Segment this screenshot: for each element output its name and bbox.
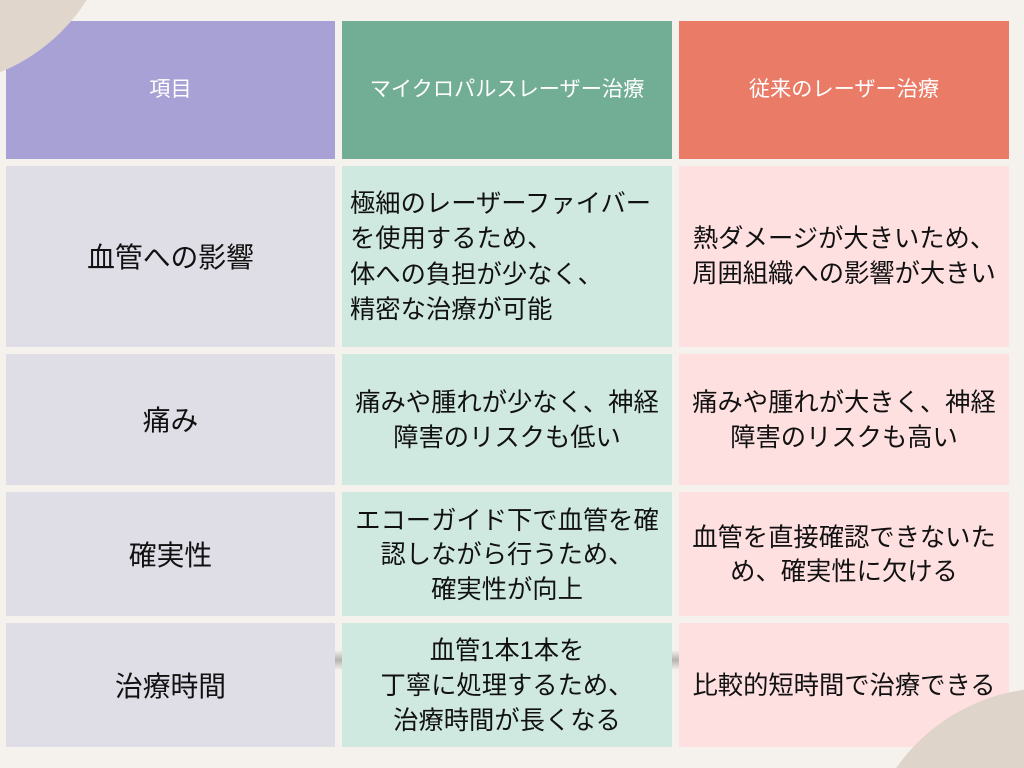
micropulse cell: vascular impact: 極細のレーザーファイバー bbox=[350, 190, 651, 218]
conventional cell: vascular impact bbox=[679, 166, 1009, 347]
row label: pain: 痛み bbox=[143, 405, 198, 436]
table header: conventional laser: 従来のレーザー治療 bbox=[749, 78, 939, 101]
row label: treatment time: 治療時間 bbox=[115, 671, 226, 702]
micropulse cell: treatment time: 血管1本1本を bbox=[430, 637, 584, 665]
row label: vascular impact: 血管への影響 bbox=[87, 242, 254, 273]
conventional cell: certainty: 血管を直接確認できないた bbox=[692, 524, 996, 552]
row label: treatment time bbox=[6, 623, 335, 747]
conventional cell: certainty: め、確実性に欠ける bbox=[730, 558, 958, 586]
micropulse cell: pain bbox=[342, 354, 672, 485]
micropulse cell: treatment time bbox=[342, 623, 672, 747]
table header: micropulse laser: マイクロパルスレーザー治療 bbox=[370, 78, 644, 101]
micropulse cell: vascular impact: 体への負担が少なく、 bbox=[350, 261, 603, 289]
micropulse cell: certainty: エコーガイド下で血管を確 bbox=[355, 507, 659, 535]
conventional cell: treatment time bbox=[679, 623, 1009, 747]
micropulse cell: vascular impact: を使用するため、 bbox=[350, 225, 552, 253]
micropulse cell: treatment time: 治療時間が長くなる bbox=[393, 707, 621, 735]
micropulse cell: treatment time: 丁寧に処理するため、 bbox=[380, 672, 633, 700]
micropulse cell: certainty: 認しながら行うため、 bbox=[380, 541, 633, 569]
shadow smudge: left gutter bbox=[335, 650, 342, 670]
micropulse cell: pain: 障害のリスクも低い bbox=[393, 424, 621, 452]
micropulse cell: vascular impact: 精密な治療が可能 bbox=[350, 296, 552, 324]
decoration: top-left circle bbox=[0, 0, 87, 72]
table header: item: 項目 bbox=[149, 78, 192, 101]
row label: certainty bbox=[6, 492, 335, 616]
row label: certainty: 確実性 bbox=[129, 540, 212, 571]
conventional cell: vascular impact: 熱ダメージが大きいため、 bbox=[693, 225, 995, 253]
decoration: bottom-right circle bbox=[896, 690, 1024, 768]
micropulse cell: certainty bbox=[342, 492, 672, 616]
conventional cell: treatment time: 比較的短時間で治療できる bbox=[692, 672, 996, 700]
conventional cell: certainty bbox=[679, 492, 1009, 616]
micropulse cell: pain: 痛みや腫れが少なく、神経 bbox=[355, 389, 659, 417]
conventional cell: pain: 障害のリスクも高い bbox=[730, 424, 958, 452]
table header: conventional laser bbox=[679, 21, 1009, 159]
row label: vascular impact bbox=[6, 166, 335, 347]
conventional cell: vascular impact: 周囲組織への影響が大きい bbox=[692, 260, 996, 288]
shadow smudge: right gutter bbox=[672, 650, 679, 670]
conventional cell: pain bbox=[679, 354, 1009, 485]
table header: item bbox=[6, 21, 335, 159]
micropulse cell: certainty: 確実性が向上 bbox=[431, 576, 583, 604]
row label: pain bbox=[6, 354, 335, 485]
micropulse cell: vascular impact bbox=[342, 166, 672, 347]
conventional cell: pain: 痛みや腫れが大きく、神経 bbox=[692, 389, 996, 417]
table header: micropulse laser bbox=[342, 21, 672, 159]
